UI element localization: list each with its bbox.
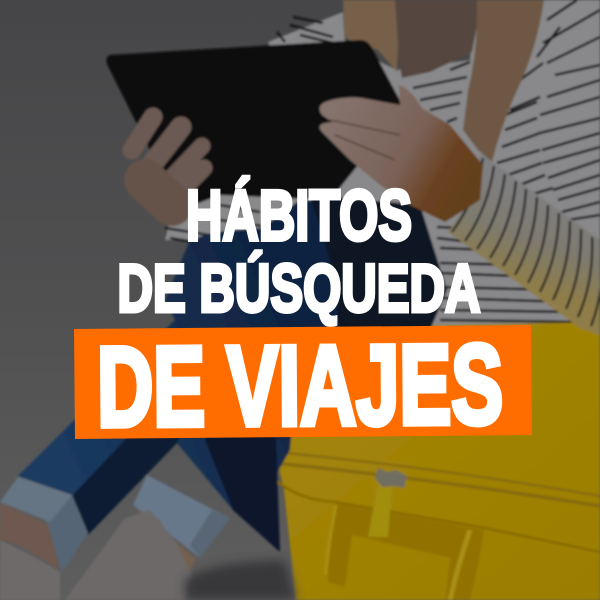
sweater body — [165, 0, 600, 335]
floor shadow — [185, 560, 296, 600]
suitcase handle — [327, 503, 484, 600]
left hand — [132, 117, 204, 205]
hair left — [343, 0, 398, 72]
tablet — [106, 40, 404, 210]
title: HÁBITOS: HÁBITOS — [186, 177, 412, 256]
zipper pull — [368, 484, 392, 537]
jeans — [18, 200, 447, 552]
neck — [392, 0, 482, 78]
suitcase — [275, 322, 600, 600]
right hand — [320, 85, 483, 222]
ankles skin — [0, 503, 60, 570]
socks — [0, 540, 60, 600]
orange banner — [74, 321, 532, 450]
hair right — [463, 0, 544, 162]
rolled cuffs — [18, 477, 88, 573]
sweater stripes — [165, 0, 600, 322]
sweater sleeve — [448, 155, 600, 336]
